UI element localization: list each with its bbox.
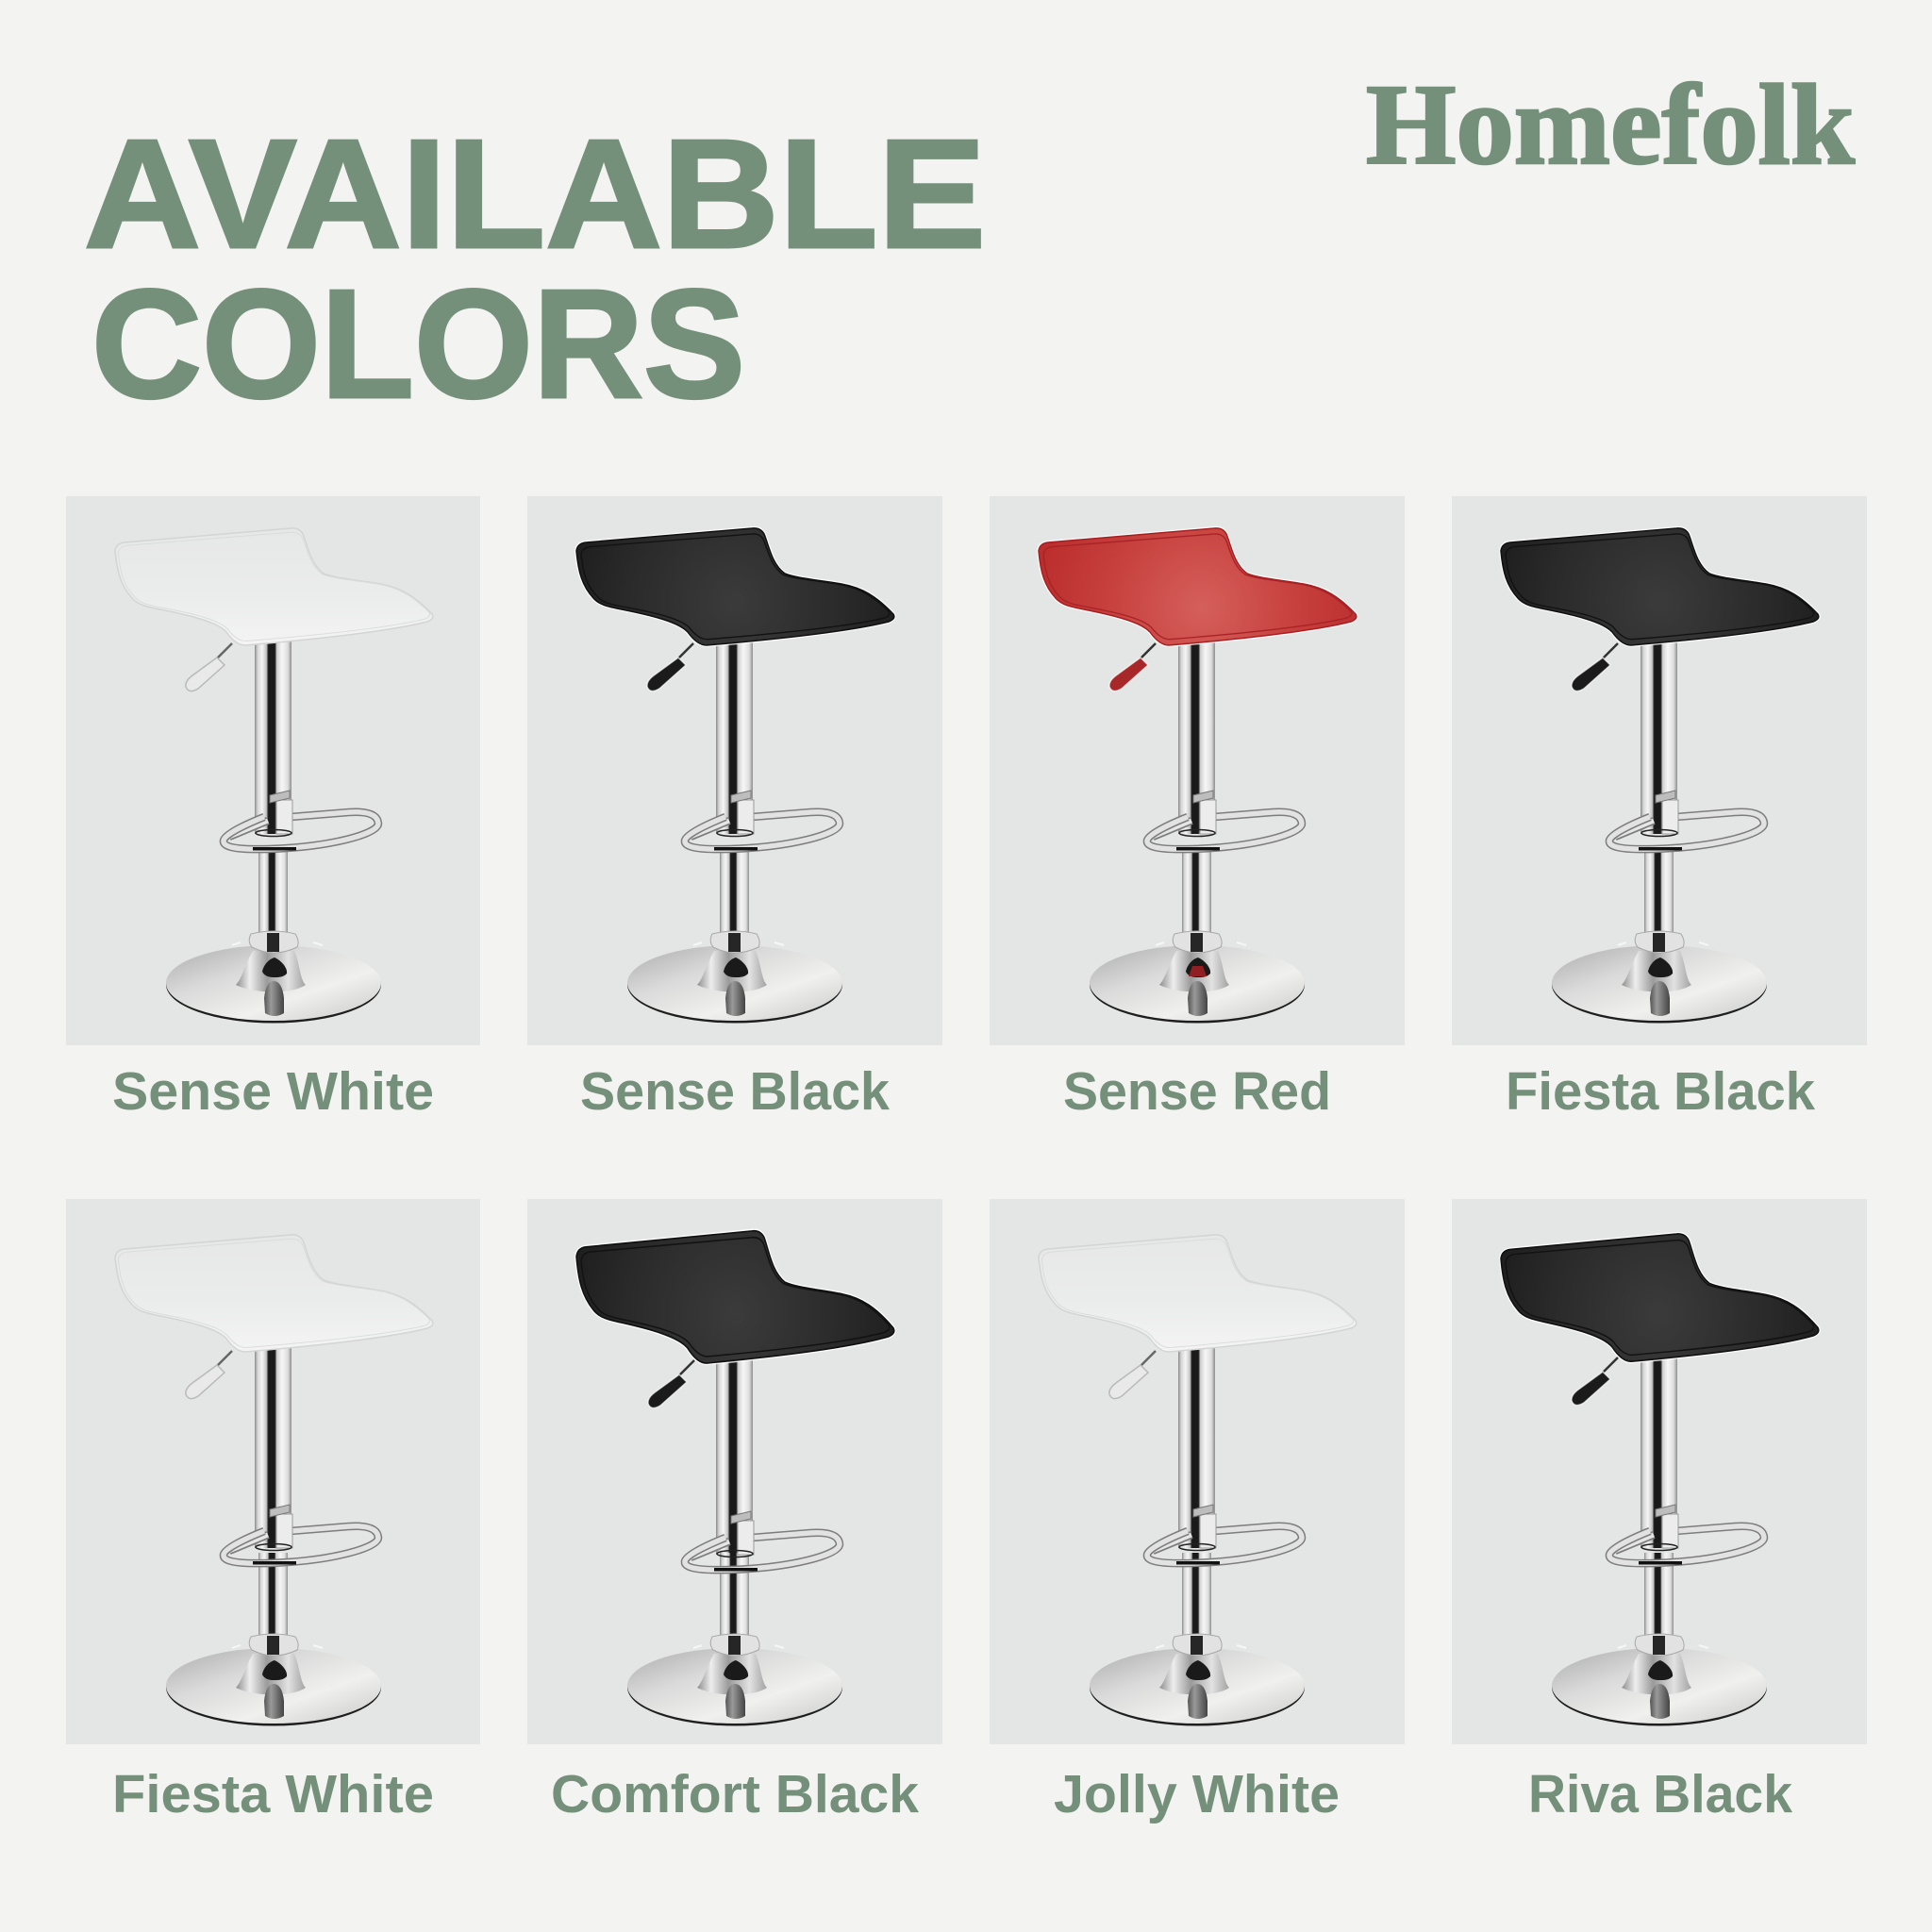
title: Available Colors — [84, 108, 986, 430]
stool: red seat — [1039, 528, 1357, 1023]
panel: Fiesta Black — [1452, 496, 1867, 1122]
label: Comfort Black — [551, 1764, 919, 1824]
panel: Sense White — [66, 496, 480, 1122]
label: Sense Black — [580, 1061, 890, 1122]
label: Fiesta White — [112, 1764, 434, 1824]
panel: Riva Black — [1452, 1199, 1867, 1824]
stool: white seat — [1039, 1235, 1357, 1726]
label: Riva Black — [1528, 1764, 1792, 1824]
panel: Comfort Black — [527, 1199, 942, 1824]
label: Sense Red — [1063, 1061, 1331, 1122]
label: Jolly White — [1054, 1764, 1340, 1824]
stool: white seat — [115, 528, 433, 1023]
label: Sense White — [112, 1061, 434, 1122]
label: Fiesta Black — [1506, 1061, 1815, 1122]
panel: Jolly White — [990, 1199, 1405, 1824]
panel: Sense Red — [990, 496, 1405, 1122]
title: Available Colors: AVAILABLE — [84, 108, 986, 280]
stool: black seat — [1501, 528, 1819, 1023]
panel: Fiesta White — [66, 1199, 480, 1824]
stool: black seat, taller cushion — [576, 1231, 894, 1726]
panel: Sense Black — [527, 496, 942, 1122]
title: Available Colors: COLORS — [92, 258, 745, 430]
stool: black seat — [1501, 1234, 1819, 1726]
logo: Homefolk: Homefolk — [1366, 61, 1855, 189]
stool: white seat — [115, 1235, 433, 1726]
stool: black seat — [576, 528, 894, 1023]
